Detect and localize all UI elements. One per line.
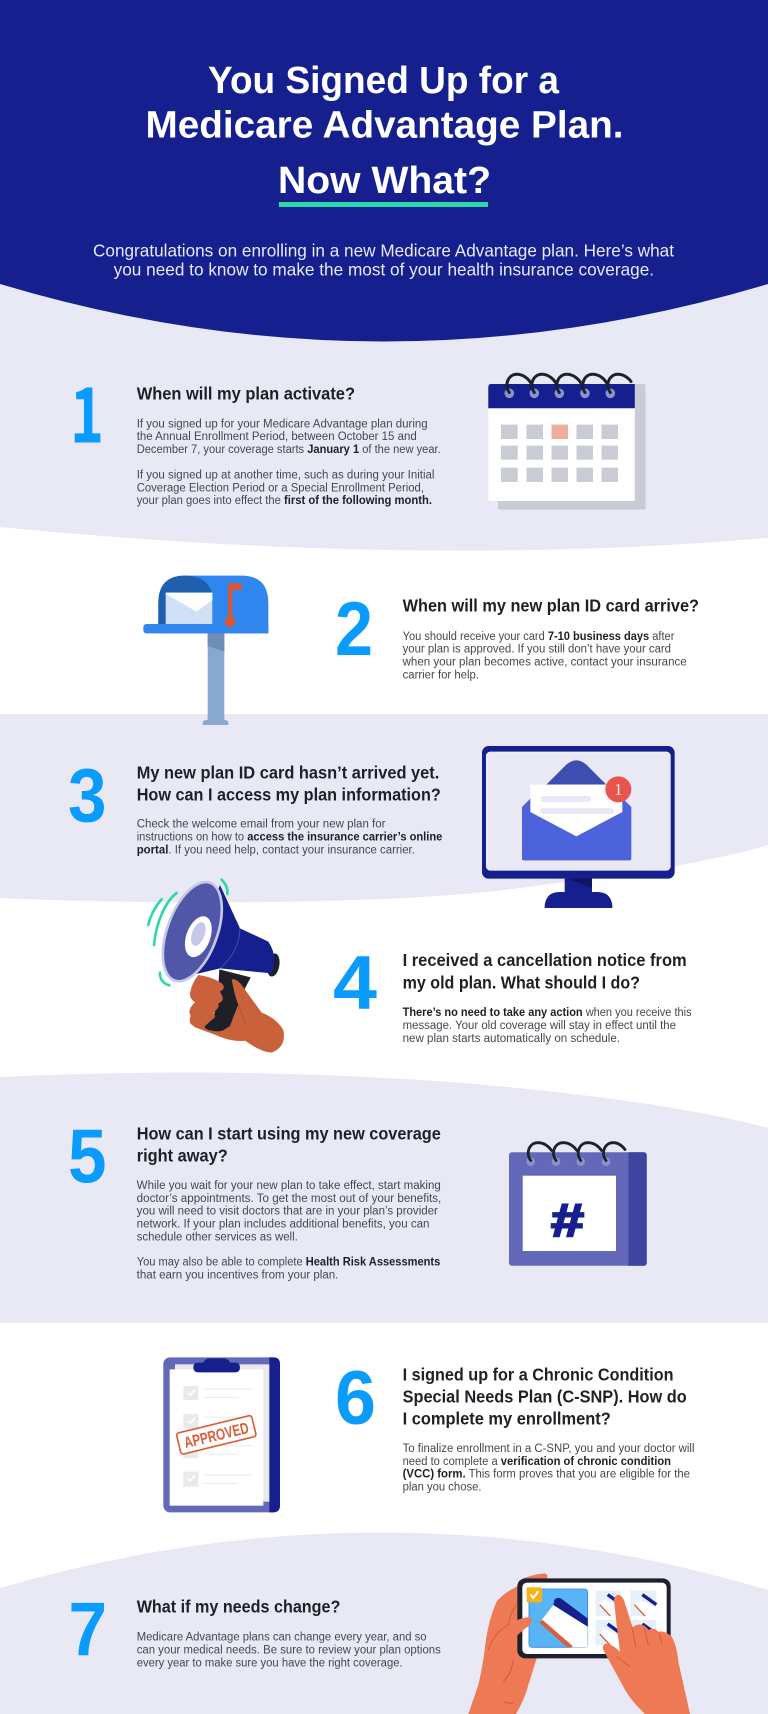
body 7: every year to make sure you have the right coverage. (137, 1657, 403, 1669)
body 2: your plan is approved. If you still don’t have your card (403, 644, 671, 656)
icon: calendar with hash (509, 1143, 647, 1266)
body 2: carrier for help. (403, 670, 479, 682)
body 2: when your plan becomes active, contact your insurance (402, 657, 687, 669)
heading 6: I signed up for a Chronic Condition (403, 1364, 674, 1384)
heading 3: My new plan ID card hasn’t arrived yet. (137, 762, 439, 782)
number 1: 1 (70, 354, 104, 464)
body 1: the Annual Enrollment Period, between October 15 and (137, 431, 417, 443)
body 1: If you signed up for your Medicare Advantage plan during (137, 418, 428, 430)
heading 6 (403, 1364, 687, 1428)
body 1: December 7, your coverage starts January 1 of the new year. (137, 444, 441, 456)
intro text: you need to know to make the most of your health insurance coverage. (114, 260, 654, 280)
intro text: Congratulations on enrolling in a new Medicare Advantage plan. Here’s what (93, 240, 674, 260)
body 5: You may also be able to complete Health Risk Assessments (137, 1257, 440, 1269)
left thumb (488, 1617, 532, 1663)
title: Medicare Advantage Plan. (146, 105, 624, 147)
heading 7: What if my needs change? (137, 1597, 340, 1617)
right hand (603, 1595, 690, 1714)
header banner (0, 0, 768, 342)
section 7 (68, 1573, 690, 1714)
approved stamp: APPROVED (183, 1420, 251, 1452)
title: You Signed Up for a (208, 60, 560, 102)
body 6: To finalize enrollment in a C-SNP, you and your doctor will (403, 1443, 694, 1455)
body 7: can your medical needs. Be sure to review your plan options (137, 1645, 441, 1657)
section 5 (68, 1115, 647, 1282)
heading 5: How can I start using my new coverage (137, 1123, 441, 1143)
body 6 (403, 1443, 694, 1494)
heading 5 (137, 1123, 441, 1166)
body 5 (137, 1180, 441, 1282)
heading 2: When will my new plan ID card arrive? (403, 596, 699, 616)
heading 3 (137, 762, 441, 804)
section 6 (163, 1356, 694, 1512)
icon: hands holding tablet (468, 1573, 690, 1714)
body 6: plan you chose. (403, 1482, 482, 1494)
number 7: 7 (68, 1588, 107, 1673)
body 4: new plan starts automatically on schedule. (403, 1033, 620, 1045)
body 6: (VCC) form. This form proves that you are eligible for the (403, 1469, 690, 1481)
number 3: 3 (68, 754, 106, 839)
icon: calendar (488, 374, 646, 510)
body 7: Medicare Advantage plans can change every year, and so (137, 1632, 427, 1644)
body 4: message. Your old coverage will stay in effect until the (403, 1020, 676, 1032)
body 5: doctor’s appointments. To get the most out of your benefits, (137, 1193, 441, 1205)
heading 6: Special Needs Plan (C-SNP). How do (403, 1386, 687, 1406)
title underline (279, 202, 488, 207)
section 2 (143, 576, 699, 725)
number 4: 4 (333, 941, 377, 1026)
body 3: instructions on how to access the insurance carrier’s online (137, 831, 442, 843)
small plan cards (596, 1591, 656, 1645)
icon: monitor with email (482, 746, 675, 908)
icon: monitor with email: 1 (614, 782, 622, 799)
section 3 (68, 746, 675, 908)
heading 5: right away? (137, 1146, 228, 1166)
body 5: network. If your plan includes additional benefits, you can (137, 1218, 429, 1230)
body 1 (137, 418, 441, 507)
body 1: your plan goes into effect the first of the following month. (137, 495, 432, 507)
body 5: that earn you incentives from your plan. (137, 1270, 338, 1282)
icon: mailbox (143, 576, 268, 725)
heading 1: When will my plan activate? (137, 383, 355, 403)
body 7 (137, 1632, 441, 1669)
body 5: you will need to visit doctors that are in your plan’s provider (137, 1206, 438, 1218)
number 5: 5 (68, 1115, 106, 1200)
body 3: Check the welcome email from your new plan for (137, 819, 386, 831)
section 4 (148, 874, 692, 1053)
icon: clipboard with approved stamp (163, 1357, 280, 1512)
title (146, 60, 624, 202)
heading 4: I received a cancellation notice from (403, 950, 687, 970)
heading 4: my old plan. What should I do? (403, 972, 640, 992)
icon: calendar with hash: # (551, 1194, 584, 1246)
heading 3: How can I access my plan information? (137, 784, 441, 804)
body 6: need to complete a verification of chronic condition (403, 1456, 671, 1468)
body 3: portal. If you need help, contact your insurance carrier. (137, 844, 415, 856)
sound waves (148, 880, 227, 985)
body 3 (137, 819, 442, 856)
number 2: 2 (335, 587, 373, 672)
body 5: schedule other services as well. (137, 1231, 298, 1243)
body 1: If you signed up at another time, such as during your Initial (137, 470, 434, 482)
intro text (93, 240, 674, 280)
body 4: There’s no need to take any action when you receive this (403, 1007, 692, 1019)
body 4 (403, 1007, 692, 1045)
number 6: 6 (335, 1356, 376, 1441)
body 1: Coverage Election Period or a Special Enrollment Period, (137, 482, 424, 494)
heading 4 (403, 950, 687, 992)
heading 6: I complete my enrollment? (403, 1408, 611, 1428)
body 2: You should receive your card 7-10 business days after (403, 631, 675, 643)
body 5: While you wait for your new plan to take effect, start making (137, 1180, 441, 1192)
title: Now What? (278, 160, 491, 202)
section 1 (70, 354, 646, 510)
body 2 (402, 631, 687, 682)
icon: megaphone in hand (148, 874, 284, 1053)
